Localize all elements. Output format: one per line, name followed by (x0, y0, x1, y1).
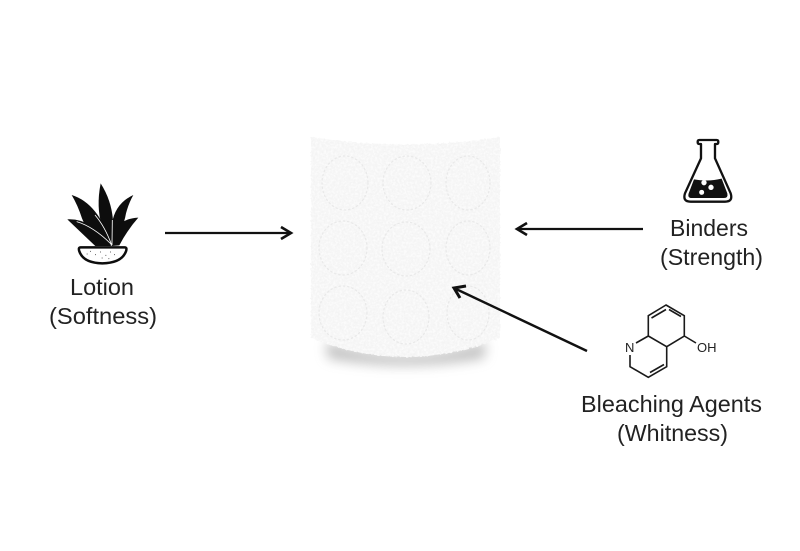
flask bubbles (699, 180, 714, 195)
paper sheet (311, 137, 500, 357)
bowl speckles (87, 251, 115, 259)
flask outline (684, 140, 731, 202)
molecule bonds (630, 305, 696, 377)
embossed dot pattern (319, 156, 490, 344)
hydroxyl label: OH (697, 340, 716, 355)
aloe bowl (79, 247, 126, 263)
icon: flask (684, 140, 731, 202)
icon: molecule (625, 305, 716, 377)
text: Lotion label: (Softness) (49, 303, 157, 329)
arrow: binders to paper (517, 223, 643, 235)
nitrogen label: N (625, 340, 634, 355)
icon: aloe plant (67, 183, 138, 263)
text: Bleaching Agents label: (Whitness) (617, 420, 728, 446)
text: Bleaching Agents label: Bleaching Agents (581, 391, 762, 417)
arrow: lotion to paper (165, 227, 291, 239)
paper texture (334, 346, 446, 357)
aloe leaf veins (77, 215, 112, 245)
flask liquid (688, 179, 728, 198)
arrow: bleaching agents to paper (454, 286, 587, 351)
text: Binders label: (Strength) (660, 244, 763, 270)
text: Binders label: Binders (670, 215, 748, 241)
paper towel roll (305, 130, 505, 370)
text: Lotion label: Lotion (70, 274, 134, 300)
aloe leaves (67, 183, 138, 246)
roll shadow (326, 342, 486, 365)
